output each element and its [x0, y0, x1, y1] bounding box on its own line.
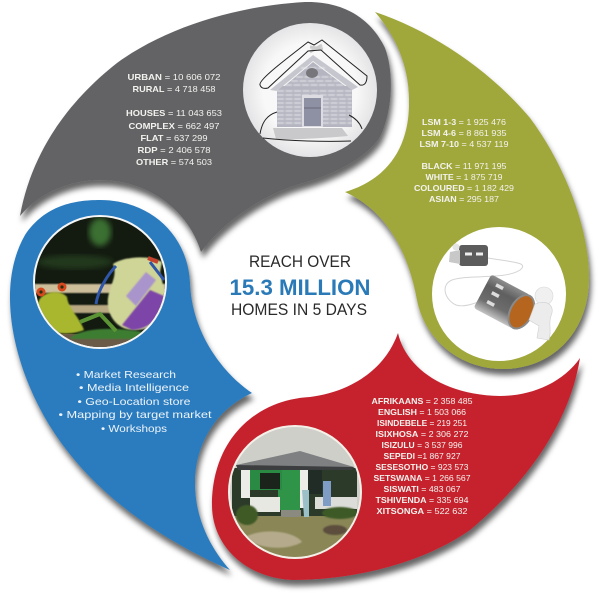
title: reach over 15.3 million homes: HOMES IN 5 DAYS: [231, 300, 367, 319]
text: language figures: ISIXHOSA = 2 306 272: [376, 429, 469, 439]
text: urban and dwelling figures: RDP = 2 406 578: [138, 145, 211, 155]
text: urban and dwelling figures: RURAL = 4 718 458: [132, 84, 216, 94]
photo: green house: [228, 425, 362, 562]
text: LSM and race figures: LSM 4-6 = 8 861 935: [422, 128, 507, 138]
text: LSM and race figures: [414, 117, 514, 204]
text: urban and dwelling figures: COMPLEX = 662 497: [128, 121, 220, 131]
text: language figures: ISINDEBELE = 219 251: [377, 418, 467, 428]
icon: tin can telephone: [432, 227, 566, 361]
title: reach over 15.3 million homes: 15.3 MILLION: [230, 275, 370, 300]
title: reach over 15.3 million homes: [230, 252, 370, 319]
text: language figures: SISWATI = 483 067: [384, 484, 461, 494]
text: services list: • Market Research: [76, 369, 176, 381]
text: language figures: ENGLISH = 1 503 066: [378, 407, 466, 417]
text: LSM and race figures: LSM 7-10 = 4 537 119: [420, 139, 509, 149]
text: services list: • Mapping by target market: [58, 409, 212, 421]
text: LSM and race figures: ASIAN = 295 187: [429, 194, 499, 204]
text: language figures: TSHIVENDA = 335 694: [376, 495, 469, 505]
text: language figures: ISIZULU = 3 537 996: [382, 440, 463, 450]
text: language figures: [372, 396, 473, 516]
text: LSM and race figures: BLACK = 11 971 195: [422, 161, 507, 171]
text: services list: [58, 369, 212, 435]
text: language figures: SETSWANA = 1 266 567: [374, 473, 471, 483]
text: LSM and race figures: WHITE = 1 875 719: [426, 172, 503, 182]
text: services list: • Media Intelligence: [79, 382, 189, 394]
text: LSM and race figures: LSM 1-3 = 1 925 476: [422, 117, 506, 127]
panel: household and dwelling statistics (grey): [20, 2, 391, 252]
title: reach over 15.3 million homes: REACH OVER: [249, 252, 351, 271]
text: urban and dwelling figures: HOUSES = 11 043 653: [126, 108, 222, 118]
text: language figures: AFRIKAANS = 2 358 485: [372, 396, 473, 406]
text: urban and dwelling figures: FLAT = 637 299: [140, 133, 208, 143]
text: urban and dwelling figures: URBAN = 10 606 072: [128, 72, 221, 82]
photo: toy frog with money bag: [33, 215, 167, 352]
icon: sketched brick house: [243, 23, 377, 157]
panel: LSM and population statistics (green): [345, 12, 589, 369]
panel: language statistics (red): [212, 333, 580, 580]
text: services list: • Workshops: [101, 423, 167, 435]
text: language figures: SESESOTHO = 923 573: [376, 462, 469, 472]
text: language figures: SEPEDI =1 867 927: [384, 451, 461, 461]
text: services list: • Geo-Location store: [78, 396, 191, 408]
text: LSM and race figures: COLOURED = 1 182 429: [414, 183, 514, 193]
text: language figures: XITSONGA = 522 632: [376, 506, 468, 516]
text: urban and dwelling figures: [126, 72, 222, 167]
text: urban and dwelling figures: OTHER = 574 503: [136, 157, 212, 167]
panel: services (blue): [10, 200, 252, 570]
